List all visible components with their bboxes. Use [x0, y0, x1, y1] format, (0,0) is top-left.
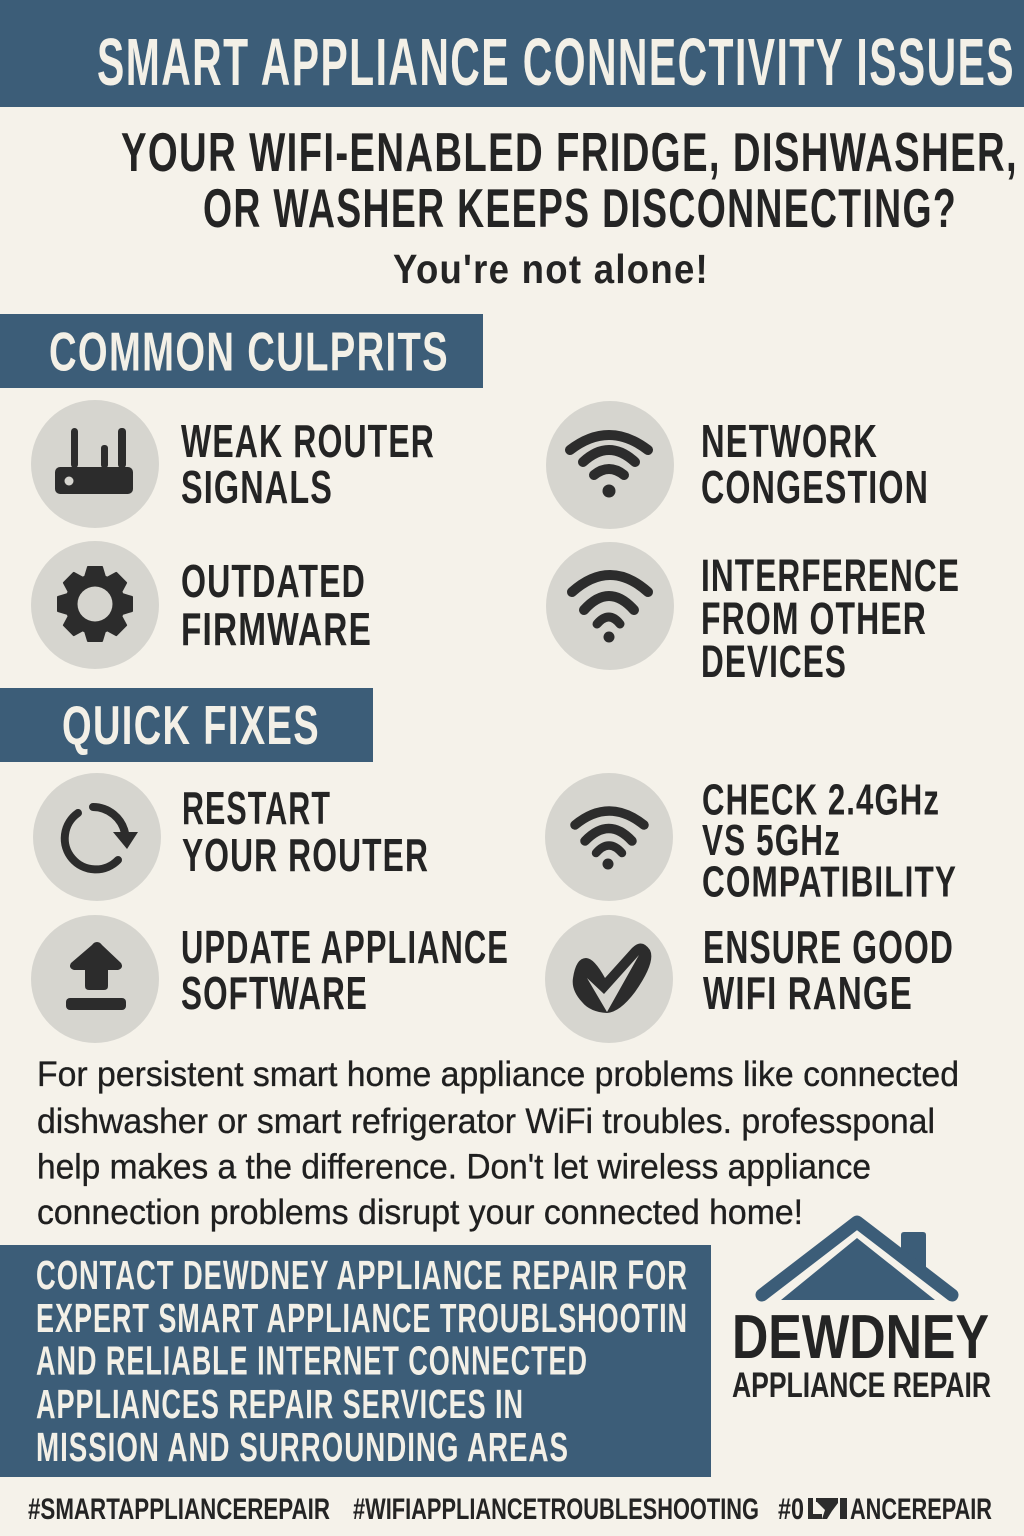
culprit: network congestion: CONGESTION: [701, 461, 929, 513]
icon: router: [55, 428, 133, 494]
icon: house roof: [762, 1222, 952, 1300]
culprit: weak router signals: WEAK ROUTER: [181, 415, 435, 467]
section heading: common culprits: [0, 314, 483, 388]
section heading: common culprits: COMMON CULPRITS: [49, 320, 449, 382]
reassurance line: You're not alone!: [393, 246, 709, 292]
body paragraph: help makes a the difference. Don't let wireless appliance: [37, 1148, 871, 1186]
fix: ensure good wifi range: [545, 915, 954, 1043]
culprit: interference: FROM OTHER: [701, 593, 927, 644]
icon: gear: [58, 567, 132, 641]
culprit: network congestion: [546, 401, 929, 529]
icon: restart arrow: [65, 807, 138, 869]
fix: update appliance software: [31, 915, 509, 1043]
hashtags: #WIFIAPPLIANCETROUBLESHOOTING: [353, 1493, 759, 1526]
body paragraph: [37, 1055, 959, 1232]
culprit: interference: [546, 542, 960, 687]
icon: wifi: [570, 435, 648, 498]
logo: Dewdney Appliance Repair: [732, 1222, 991, 1405]
culprit: interference: DEVICES: [701, 636, 847, 687]
fix: restart your router: [33, 773, 429, 901]
section heading: quick fixes: [0, 688, 373, 762]
title banner: [0, 0, 1024, 107]
call to action panel: AND RELIABLE INTERNET CONNECTED: [36, 1338, 588, 1384]
culprit: outdated firmware: FIRMWARE: [181, 603, 372, 655]
fix: restart your router: YOUR ROUTER: [182, 829, 429, 881]
fix: restart your router: RESTART: [182, 782, 331, 834]
icon: wifi: [575, 811, 644, 870]
fix: check 2.4GHz vs 5GHz compatibility: VS 5GHz: [702, 817, 841, 865]
body paragraph: connection problems disrupt your connected home!: [37, 1193, 803, 1232]
fix: ensure good wifi range: WIFI RANGE: [703, 967, 913, 1019]
section heading: quick fixes: QUICK FIXES: [62, 694, 320, 756]
culprit: weak router signals: [31, 400, 435, 528]
culprit: network congestion: NETWORK: [701, 415, 878, 467]
hashtags: #SMARTAPPLIANCEREPAIR: [28, 1493, 330, 1526]
culprit: weak router signals: SIGNALS: [181, 461, 333, 513]
call to action panel: APPLIANCES REPAIR SERVICES IN: [36, 1381, 524, 1427]
fix: update appliance software: UPDATE APPLIANCE: [181, 921, 509, 973]
culprit: outdated firmware: [31, 541, 372, 669]
call to action panel: [0, 1245, 711, 1477]
body paragraph: dishwasher or smart refrigerator WiFi troubles. professponal: [37, 1102, 935, 1141]
icon: upload: [66, 942, 126, 1010]
hashtags: [28, 1493, 992, 1526]
call to action panel: MISSION AND SURROUNDING AREAS: [36, 1424, 569, 1470]
fix: update appliance software: SOFTWARE: [181, 967, 368, 1019]
body paragraph: For persistent smart home appliance problems like connected: [37, 1055, 959, 1094]
fix: check 2.4GHz vs 5GHz compatibility: [545, 773, 957, 906]
subheading question: [121, 121, 1018, 239]
call to action panel: EXPERT SMART APPLIANCE TROUBLSHOOTIN: [36, 1295, 688, 1341]
culprit: outdated firmware: OUTDATED: [181, 555, 366, 607]
call to action panel: CONTACT DEWDNEY APPLIANCE REPAIR FOR: [36, 1252, 688, 1298]
icon: wifi: [572, 575, 648, 642]
hashtags: #0: [778, 1493, 804, 1526]
icon: check mark: [573, 943, 651, 1013]
